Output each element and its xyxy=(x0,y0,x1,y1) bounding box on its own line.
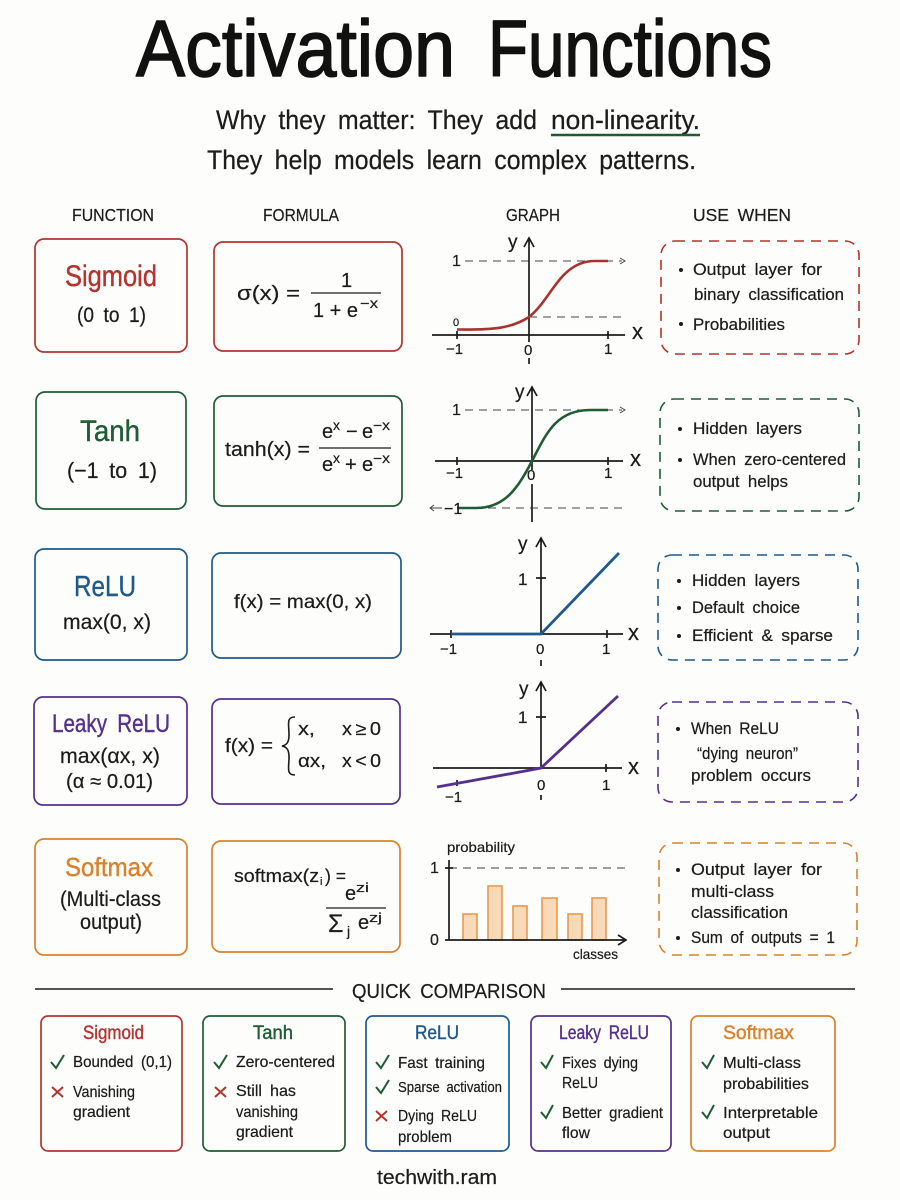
graph: relu line: 1 xyxy=(602,641,610,658)
panel: relu use when: Hidden layers xyxy=(692,571,800,590)
comparison card: leaky relu: flow xyxy=(562,1125,590,1142)
panel: softmax formula: e xyxy=(345,883,356,905)
graph: relu line: 1 xyxy=(518,570,527,589)
comparison card: softmax: Interpretable xyxy=(723,1105,818,1122)
panel: sigmoid formula xyxy=(214,242,402,351)
row: softmax xyxy=(35,839,857,962)
panel: sigmoid use when xyxy=(661,241,859,354)
panel: tanh name xyxy=(36,392,186,509)
comparison card: tanh xyxy=(203,1016,345,1151)
panel: relu use when: Default choice xyxy=(692,598,800,617)
panel: sigmoid formula: 1 + e xyxy=(313,300,358,322)
panel: sigmoid use when: binary classification xyxy=(694,285,844,304)
panel: relu use when: Efficient & sparse xyxy=(692,626,833,645)
panel: leaky relu name: Leaky ReLU xyxy=(52,710,170,738)
panel: leaky relu use when: When ReLU xyxy=(691,719,779,738)
graph: tanh curve: −1 xyxy=(444,501,462,518)
panel: tanh formula: e xyxy=(322,421,333,443)
row: tanh xyxy=(36,382,859,522)
graph: sigmoid curve xyxy=(432,232,643,364)
panel: tanh formula: e xyxy=(362,454,373,476)
panel: softmax name: Softmax xyxy=(65,852,153,882)
panel: relu formula xyxy=(212,553,401,658)
panel: tanh formula: tanh(x) = xyxy=(225,439,310,461)
comparison card: sigmoid: Vanishing xyxy=(73,1084,135,1101)
column headers: FUNCTION xyxy=(72,205,154,225)
panel: leaky relu name: (α ≈ 0.01) xyxy=(66,771,153,793)
panel: relu formula: f(x) = max(0, x) xyxy=(234,592,372,613)
graph: sigmoid curve: 1 xyxy=(604,341,612,358)
panel: sigmoid formula: σ(x) = xyxy=(237,283,300,305)
graph: leaky relu line: 1 xyxy=(602,777,610,794)
panel: softmax use when: multi-class xyxy=(691,882,774,901)
panel: softmax use when: Sum of outputs = 1 xyxy=(691,928,835,947)
comparison card: tanh: Tanh xyxy=(253,1023,293,1044)
panel: softmax formula: i xyxy=(320,876,322,888)
column headers: GRAPH xyxy=(506,205,560,225)
panel: leaky relu use when xyxy=(658,702,858,802)
comparison card: softmax: output xyxy=(723,1125,771,1142)
graph: relu line: x xyxy=(628,620,639,645)
graph: relu line: −1 xyxy=(440,641,457,658)
comparison card: softmax: Multi-class xyxy=(723,1055,801,1072)
comparison card: sigmoid xyxy=(41,1016,182,1151)
panel: softmax formula xyxy=(212,841,400,952)
comparison card: sigmoid: Bounded (0,1) xyxy=(73,1054,172,1071)
panel: sigmoid use when: Probabilities xyxy=(693,315,785,334)
comparison card: relu: ReLU xyxy=(415,1023,459,1044)
panel: leaky relu formula: αx, xyxy=(298,751,326,771)
graph: leaky relu line: 0 xyxy=(537,777,545,794)
panel: softmax formula: e xyxy=(358,912,369,934)
graph: leaky relu line: x xyxy=(628,754,639,779)
comparison card: leaky relu: Better gradient xyxy=(562,1105,664,1122)
panel: softmax use when: classification xyxy=(691,903,788,922)
panel: sigmoid formula: −x xyxy=(360,295,378,311)
panel: leaky relu formula: x, xyxy=(298,719,315,739)
graph: leaky relu line xyxy=(433,679,639,806)
panel: leaky relu formula: f(x) = xyxy=(225,736,273,757)
panel: tanh formula: x xyxy=(333,417,340,433)
comparison card: leaky relu xyxy=(531,1016,671,1151)
chart: softmax bars xyxy=(430,839,626,962)
title: Activation xyxy=(136,4,455,93)
panel: tanh name: (−1 to 1) xyxy=(67,458,157,483)
panel: sigmoid formula: 1 xyxy=(341,270,352,292)
panel: softmax use when: Output layer for xyxy=(691,860,822,879)
graph: sigmoid curve: y xyxy=(508,232,518,253)
comparison card: relu: Dying ReLU xyxy=(398,1108,477,1125)
panel: tanh formula: − xyxy=(346,421,358,443)
panel: relu use when xyxy=(658,555,858,660)
panel: tanh use when: Hidden layers xyxy=(693,419,802,438)
column headers: USE WHEN xyxy=(693,205,791,225)
comparison card: softmax: probabilities xyxy=(723,1076,809,1093)
column headers: FORMULA xyxy=(263,205,339,225)
graph: sigmoid curve: x xyxy=(632,319,643,344)
comparison card: relu: Sparse activation xyxy=(398,1079,502,1096)
title: Functions xyxy=(488,4,772,93)
comparison card: sigmoid: Sigmoid xyxy=(83,1023,144,1044)
panel: tanh name: Tanh xyxy=(80,415,140,448)
panel: relu name xyxy=(35,549,187,660)
subtitle: non-linearity. xyxy=(551,105,700,135)
graph: sigmoid curve: −1 xyxy=(446,341,463,358)
comparison card: relu: problem xyxy=(398,1129,452,1146)
panel: softmax name: output) xyxy=(80,911,142,934)
comparison card: leaky relu: Fixes dying xyxy=(562,1055,638,1072)
panel: softmax use when xyxy=(659,843,857,955)
graph: tanh curve: 1 xyxy=(604,465,612,482)
comparison card: sigmoid: gradient xyxy=(73,1104,131,1121)
panel: tanh use when: When zero-centered xyxy=(693,450,846,469)
footer credit: techwith.ram xyxy=(377,1167,497,1189)
panel: leaky relu use when: “dying neuron” xyxy=(697,744,798,763)
panel: softmax name: (Multi-class xyxy=(60,888,161,911)
graph: relu line: y xyxy=(518,534,528,555)
panel: tanh formula: e xyxy=(362,421,373,443)
subtitle: Why they matter: They add xyxy=(216,105,537,135)
graph: tanh curve xyxy=(430,382,641,522)
graph: relu line: 0 xyxy=(536,641,544,658)
comparison card: relu xyxy=(366,1016,509,1151)
chart: softmax bars: 1 xyxy=(430,860,439,877)
row: relu xyxy=(35,534,858,666)
panel: tanh formula: x xyxy=(333,450,340,466)
graph: leaky relu line: y xyxy=(519,679,529,700)
panel: softmax name xyxy=(35,839,187,955)
row: sigmoid xyxy=(35,232,859,364)
panel: tanh use when xyxy=(660,399,859,511)
comparison card: tanh: vanishing xyxy=(236,1104,298,1121)
graph: tanh curve: 0 xyxy=(527,467,535,484)
panel: leaky relu name xyxy=(34,697,187,805)
panel: leaky relu formula: x < 0 xyxy=(342,751,381,771)
graph: relu line xyxy=(430,534,639,666)
panel: leaky relu formula: x ≥ 0 xyxy=(342,719,381,739)
title xyxy=(136,4,772,93)
panel: sigmoid name: (0 to 1) xyxy=(77,304,146,327)
graph: tanh curve: y xyxy=(515,382,525,403)
panel: tanh use when: output helps xyxy=(693,472,788,491)
panel: relu name: max(0, x) xyxy=(63,611,151,634)
graph: sigmoid curve: 1 xyxy=(452,253,461,270)
panel: leaky relu name: max(αx, x) xyxy=(60,745,160,768)
comparison card: softmax xyxy=(691,1016,835,1151)
panel: tanh formula: −x xyxy=(373,417,390,433)
column headers xyxy=(72,205,791,225)
graph: tanh curve: 1 xyxy=(452,402,461,419)
panel: leaky relu formula xyxy=(212,699,400,804)
panel: softmax formula: Σ xyxy=(328,910,343,938)
comparison card: relu: Fast training xyxy=(398,1055,485,1072)
chart: softmax bars: classes xyxy=(573,946,618,962)
graph: leaky relu line: 1 xyxy=(518,708,527,727)
panel: sigmoid use when: Output layer for xyxy=(693,260,822,279)
panel: leaky relu use when: problem occurs xyxy=(691,766,811,785)
comparison card: leaky relu: Leaky ReLU xyxy=(559,1023,649,1044)
panel: sigmoid name xyxy=(35,239,187,352)
graph: sigmoid curve: 0 xyxy=(524,342,532,359)
subtitle: They help models learn complex patterns. xyxy=(207,145,696,175)
panel: tanh formula: e xyxy=(322,454,333,476)
panel: softmax formula: ) = xyxy=(325,866,346,886)
panel: softmax formula: zi xyxy=(356,880,369,895)
panel: softmax formula: softmax(z xyxy=(234,866,319,886)
panel: relu name: ReLU xyxy=(74,571,136,603)
chart: softmax bars: 0 xyxy=(430,932,439,949)
panel: softmax formula: zj xyxy=(369,910,382,925)
panel: tanh formula: + xyxy=(345,454,357,476)
subtitle xyxy=(207,105,700,175)
comparison card: tanh: Still has xyxy=(236,1083,296,1100)
panel: sigmoid name: Sigmoid xyxy=(65,260,157,293)
chart: softmax bars: probability xyxy=(447,839,515,855)
graph: tanh curve: x xyxy=(630,446,641,471)
section heading: quick comparison: QUICK COMPARISON xyxy=(352,981,546,1003)
comparison card: tanh: Zero-centered xyxy=(236,1054,335,1071)
comparison card: leaky relu: ReLU xyxy=(562,1075,598,1092)
comparison card: softmax: Softmax xyxy=(723,1023,794,1044)
panel: softmax formula: j xyxy=(346,923,350,939)
panel: tanh formula xyxy=(214,396,402,506)
comparison card: tanh: gradient xyxy=(236,1124,294,1141)
graph: leaky relu line: −1 xyxy=(445,789,462,806)
panel: tanh formula: −x xyxy=(373,450,390,466)
graph: tanh curve: −1 xyxy=(446,465,463,482)
graph: sigmoid curve: 0 xyxy=(453,317,459,329)
row: leaky relu xyxy=(34,679,858,806)
